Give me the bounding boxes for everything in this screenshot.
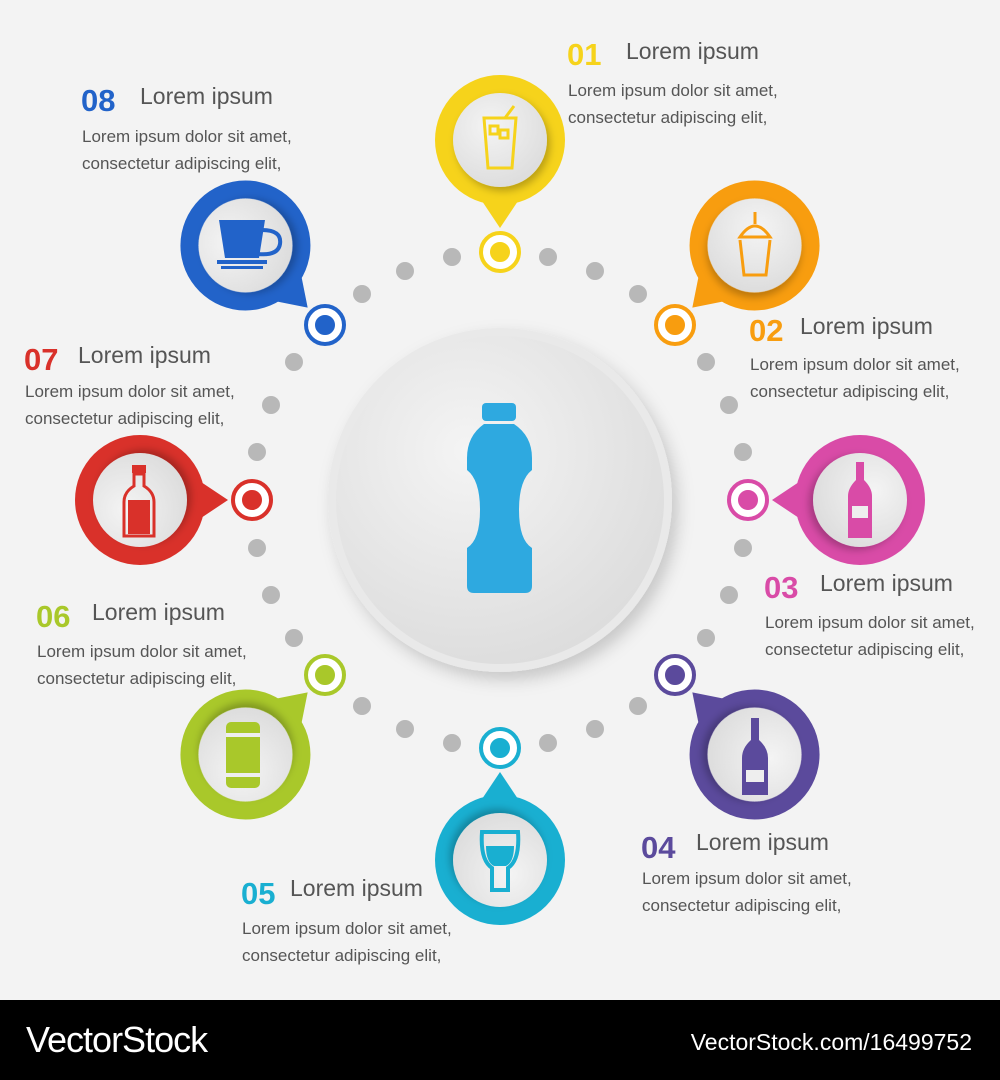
- pin 05: [435, 772, 565, 925]
- text 06: Lorem ipsum dolor sit amet,: [37, 642, 247, 661]
- footer: VectorStock: [26, 1019, 209, 1060]
- pin 04: [646, 646, 846, 846]
- text 05: consectetur adipiscing elit,: [242, 946, 441, 965]
- text 04: Lorem ipsum: [696, 829, 829, 855]
- text 04: 04: [641, 830, 676, 865]
- text 05: [241, 875, 452, 965]
- text 07: 07: [24, 342, 58, 377]
- text 02: consectetur adipiscing elit,: [750, 382, 949, 401]
- text 01: [567, 37, 778, 127]
- text 07: Lorem ipsum: [78, 342, 211, 368]
- footer: VectorStock.com/16499752: [691, 1029, 972, 1055]
- text 01: Lorem ipsum dolor sit amet,: [568, 81, 778, 100]
- markers: [233, 233, 767, 767]
- text 03: 03: [764, 570, 798, 605]
- text 02: [749, 313, 960, 401]
- text 02: 02: [749, 313, 783, 348]
- text 05: 05: [241, 876, 275, 911]
- text 08: Lorem ipsum: [140, 83, 273, 109]
- pin 01: [435, 75, 565, 228]
- text 06: Lorem ipsum: [92, 599, 225, 625]
- text 03: Lorem ipsum: [820, 570, 953, 596]
- text 06: consectetur adipiscing elit,: [37, 669, 236, 688]
- pin 02: [646, 154, 846, 354]
- text 04: [641, 829, 852, 915]
- text 01: Lorem ipsum: [626, 38, 759, 64]
- footer: [0, 1000, 1000, 1080]
- text 04: consectetur adipiscing elit,: [642, 896, 841, 915]
- text 03: consectetur adipiscing elit,: [765, 640, 964, 659]
- text 03: Lorem ipsum dolor sit amet,: [765, 613, 975, 632]
- text 01: 01: [567, 37, 601, 72]
- text 06: [36, 599, 247, 688]
- text 04: Lorem ipsum dolor sit amet,: [642, 869, 852, 888]
- text 02: Lorem ipsum dolor sit amet,: [750, 355, 960, 374]
- text 05: Lorem ipsum dolor sit amet,: [242, 919, 452, 938]
- text 08: 08: [81, 83, 115, 118]
- text 03: [764, 570, 975, 659]
- text 08: [81, 83, 292, 173]
- pin 07: [75, 435, 228, 565]
- icon: water bottle: [467, 403, 532, 593]
- pin 03: [772, 435, 925, 565]
- pin 08: [154, 154, 354, 354]
- text 08: Lorem ipsum dolor sit amet,: [82, 127, 292, 146]
- text 07: Lorem ipsum dolor sit amet,: [25, 382, 235, 401]
- pin 06: [154, 646, 354, 846]
- dotted ring: [248, 248, 752, 752]
- text 05: Lorem ipsum: [290, 875, 423, 901]
- text 01: consectetur adipiscing elit,: [568, 108, 767, 127]
- text 07: [24, 342, 235, 428]
- text 02: Lorem ipsum: [800, 313, 933, 339]
- text 08: consectetur adipiscing elit,: [82, 154, 281, 173]
- text 07: consectetur adipiscing elit,: [25, 409, 224, 428]
- center circle with bottle: [328, 328, 672, 672]
- text 06: 06: [36, 599, 70, 634]
